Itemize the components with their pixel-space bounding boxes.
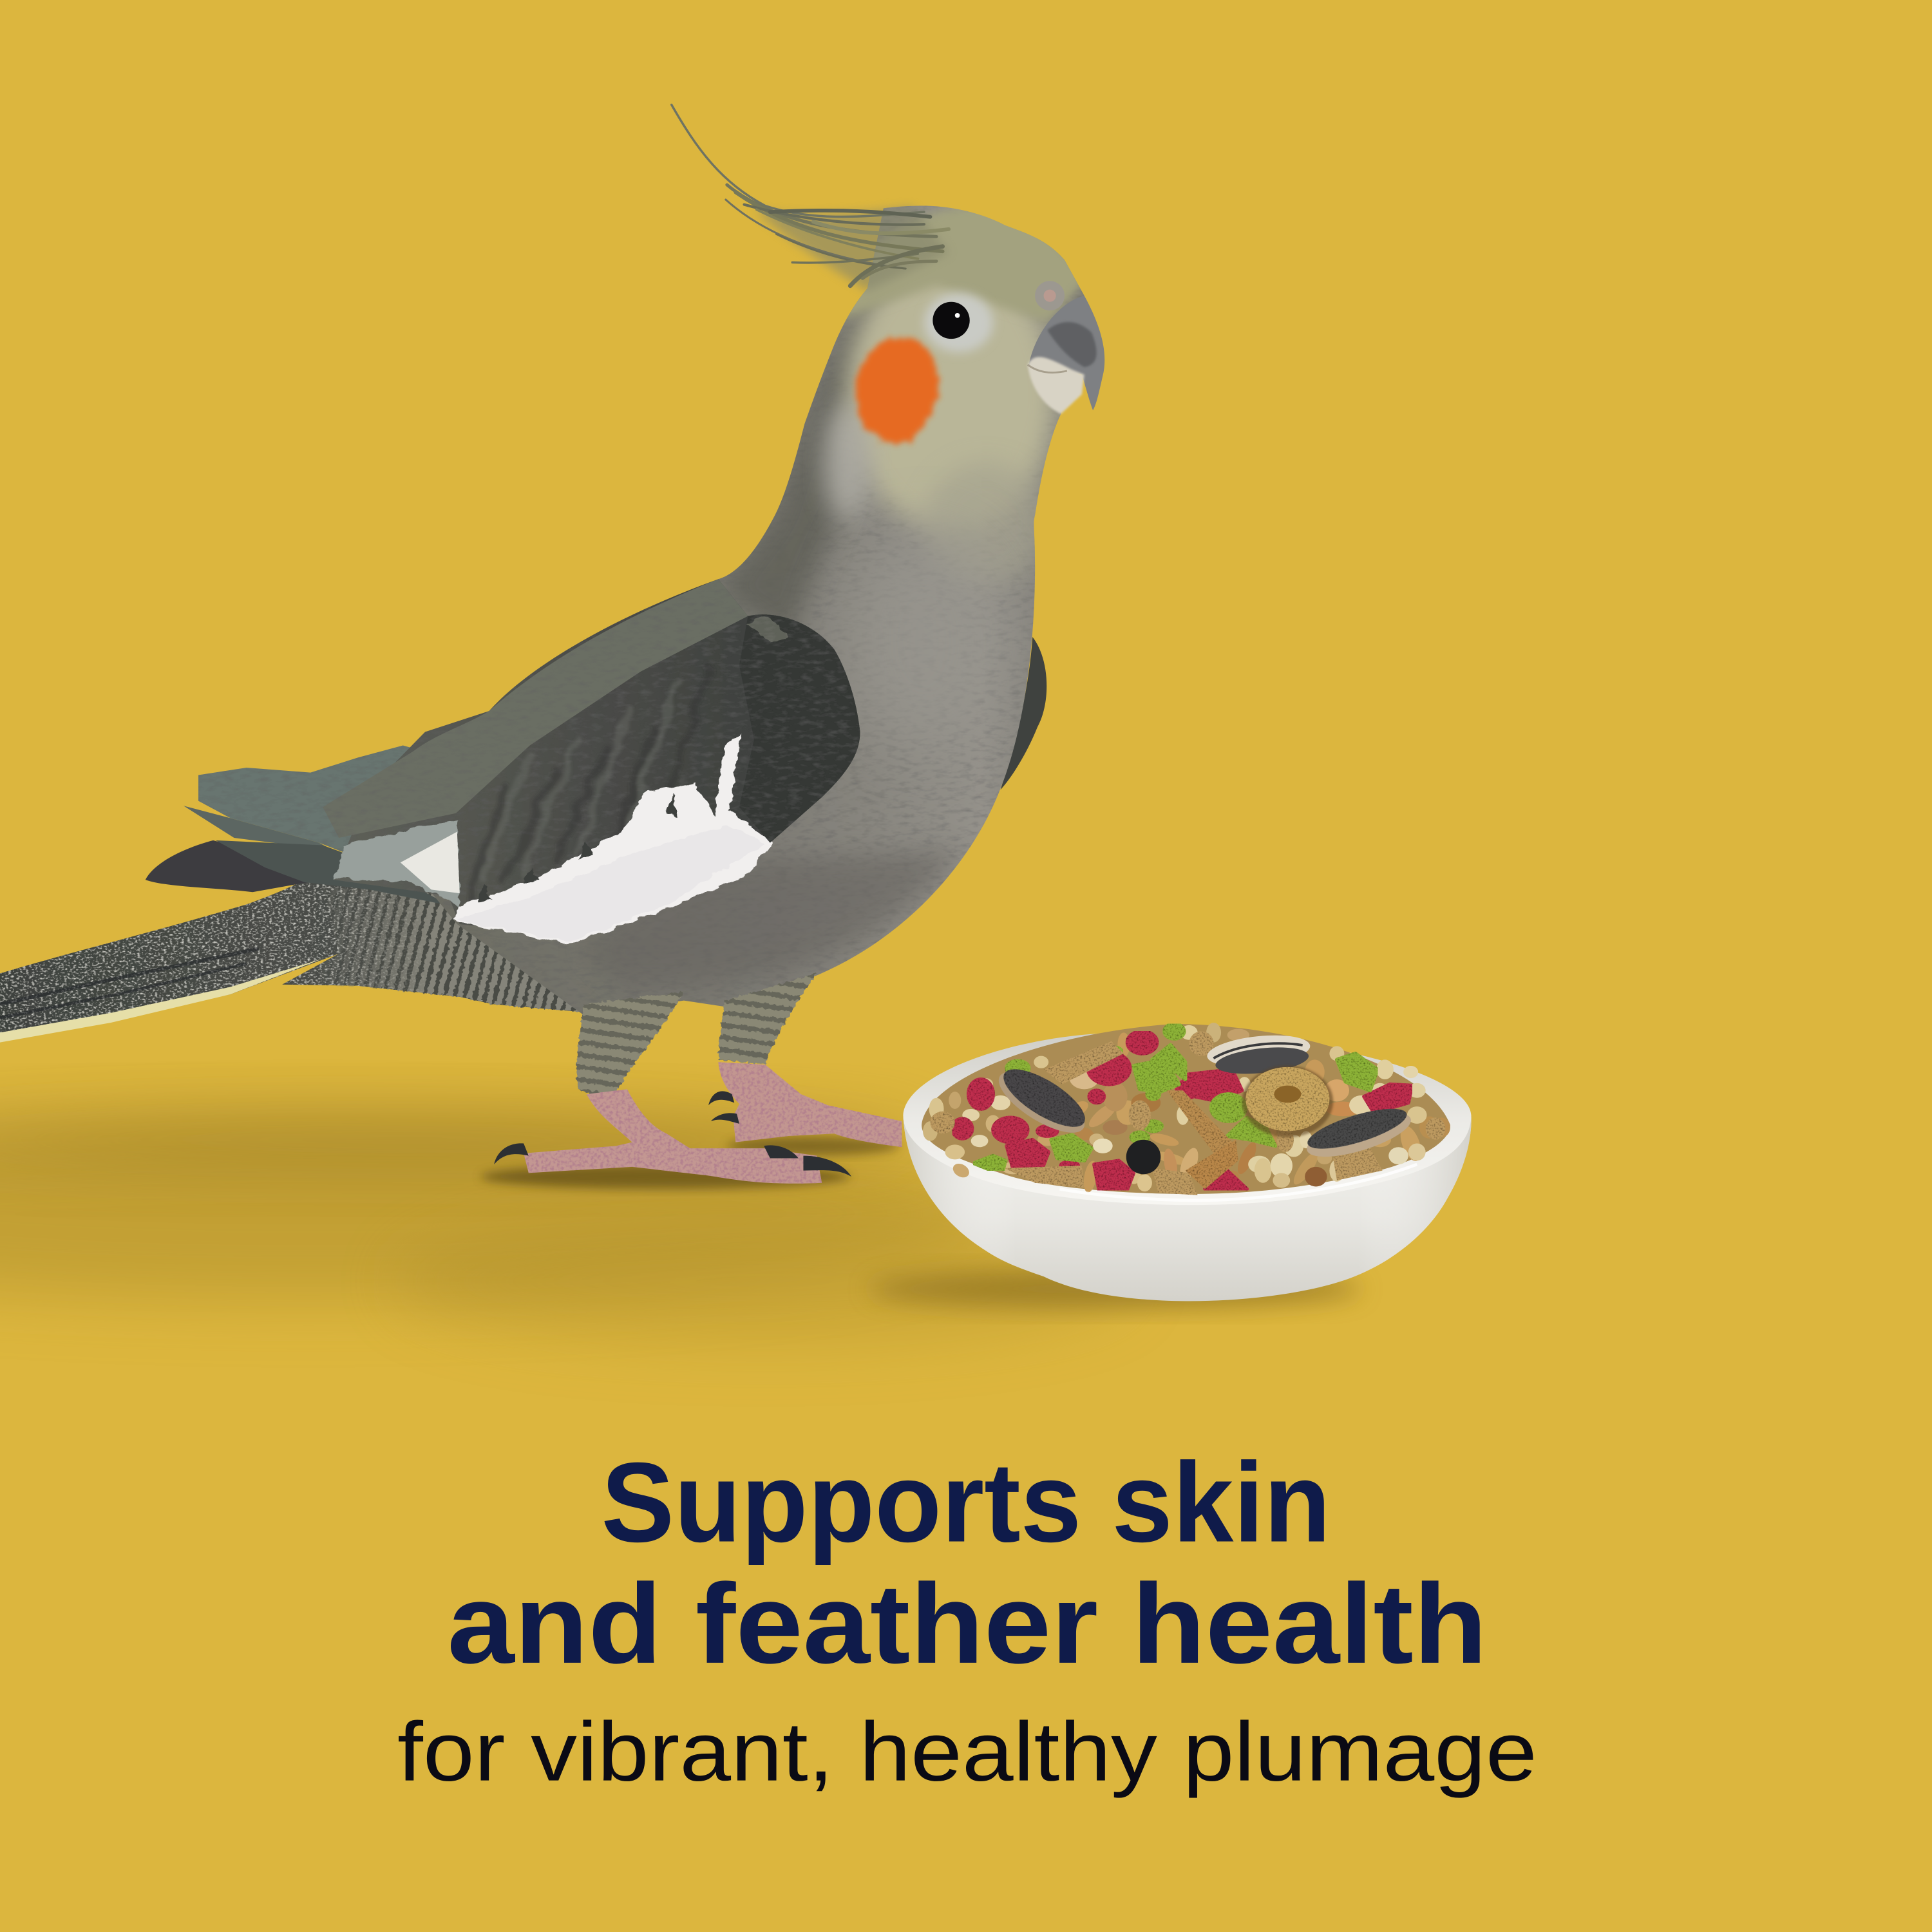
infographic canvas — [0, 103, 1533, 1798]
rear claws — [494, 1143, 851, 1177]
eye — [924, 293, 993, 352]
food base — [922, 1024, 1450, 1194]
far wing — [1001, 637, 1046, 790]
headline line 2: and feather health — [448, 1561, 1487, 1687]
headline — [448, 1439, 1487, 1687]
cockatiel bird — [0, 105, 1104, 1184]
bowl rim — [903, 1032, 1471, 1205]
rear leg — [494, 992, 851, 1184]
wing — [323, 579, 860, 945]
bowl body — [903, 1115, 1472, 1301]
sunflower seed left — [990, 1057, 1095, 1144]
floor shadow — [0, 1110, 1361, 1343]
kibble chunks — [931, 1031, 1445, 1195]
rear foot — [524, 1089, 822, 1184]
wing feather streaks — [468, 665, 708, 900]
nape shading — [721, 313, 869, 623]
white wing patch — [453, 732, 773, 945]
body and head — [394, 197, 1090, 1035]
subheading: for vibrant, healthy plumage — [397, 1705, 1537, 1799]
front leg — [708, 973, 902, 1147]
front foot — [718, 1062, 902, 1147]
dark berry — [1126, 1140, 1160, 1174]
dark wing tip — [739, 614, 860, 843]
neck and face colouring — [846, 256, 1056, 533]
beak — [1028, 281, 1104, 414]
cereal ring — [1242, 1066, 1333, 1137]
headline line 1: Supports skin — [601, 1439, 1331, 1566]
cheek patch — [848, 329, 947, 450]
upper tail coverts — [146, 746, 450, 905]
pressed sticks — [1167, 1090, 1236, 1158]
sunflower seed top — [1206, 1031, 1312, 1079]
sunflower seed right — [1302, 1100, 1416, 1166]
bowl of food — [903, 1023, 1472, 1301]
crest — [672, 105, 949, 291]
long tail feathers — [0, 880, 591, 1043]
wing shoulder band — [323, 579, 748, 838]
red pieces — [952, 1031, 1412, 1190]
green pieces — [973, 1024, 1378, 1171]
pale wing feathers — [334, 819, 460, 905]
front claws — [708, 1091, 739, 1124]
shoulder feather tuft — [746, 616, 788, 643]
seeds and grains — [923, 1023, 1450, 1193]
bowl lip highlight — [1059, 1164, 1417, 1200]
